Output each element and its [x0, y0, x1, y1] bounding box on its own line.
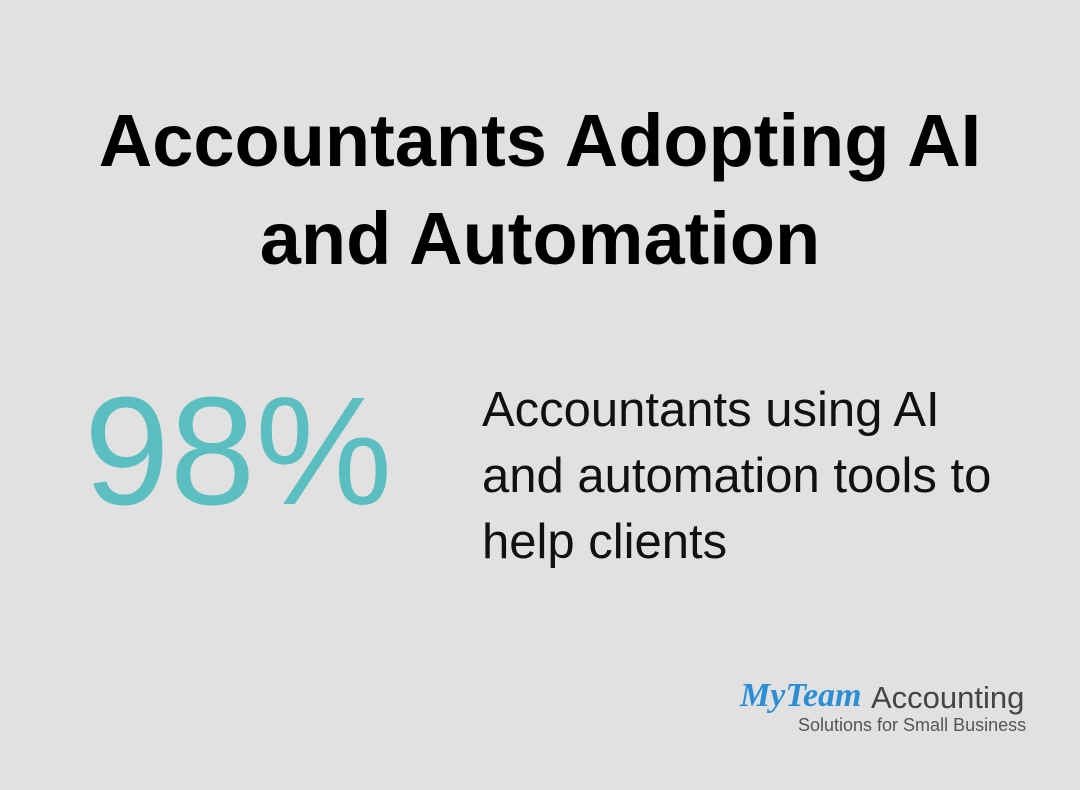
statistic description: Accountants using AI	[482, 383, 940, 437]
title	[99, 99, 981, 280]
statistic description: and automation tools to	[482, 449, 991, 503]
title: Accountants Adopting AI	[99, 99, 981, 182]
logo: MyTeam Accounting	[740, 677, 1026, 735]
statistic description	[482, 383, 991, 569]
statistic: 98%: 98%	[84, 365, 392, 537]
title: and Automation	[260, 197, 820, 280]
statistic description: help clients	[482, 515, 727, 569]
logo: MyTeam Accounting: Solutions for Small Business	[798, 715, 1026, 735]
logo: MyTeam Accounting: Accounting	[871, 680, 1024, 715]
logo: MyTeam Accounting: MyTeam	[740, 677, 862, 714]
